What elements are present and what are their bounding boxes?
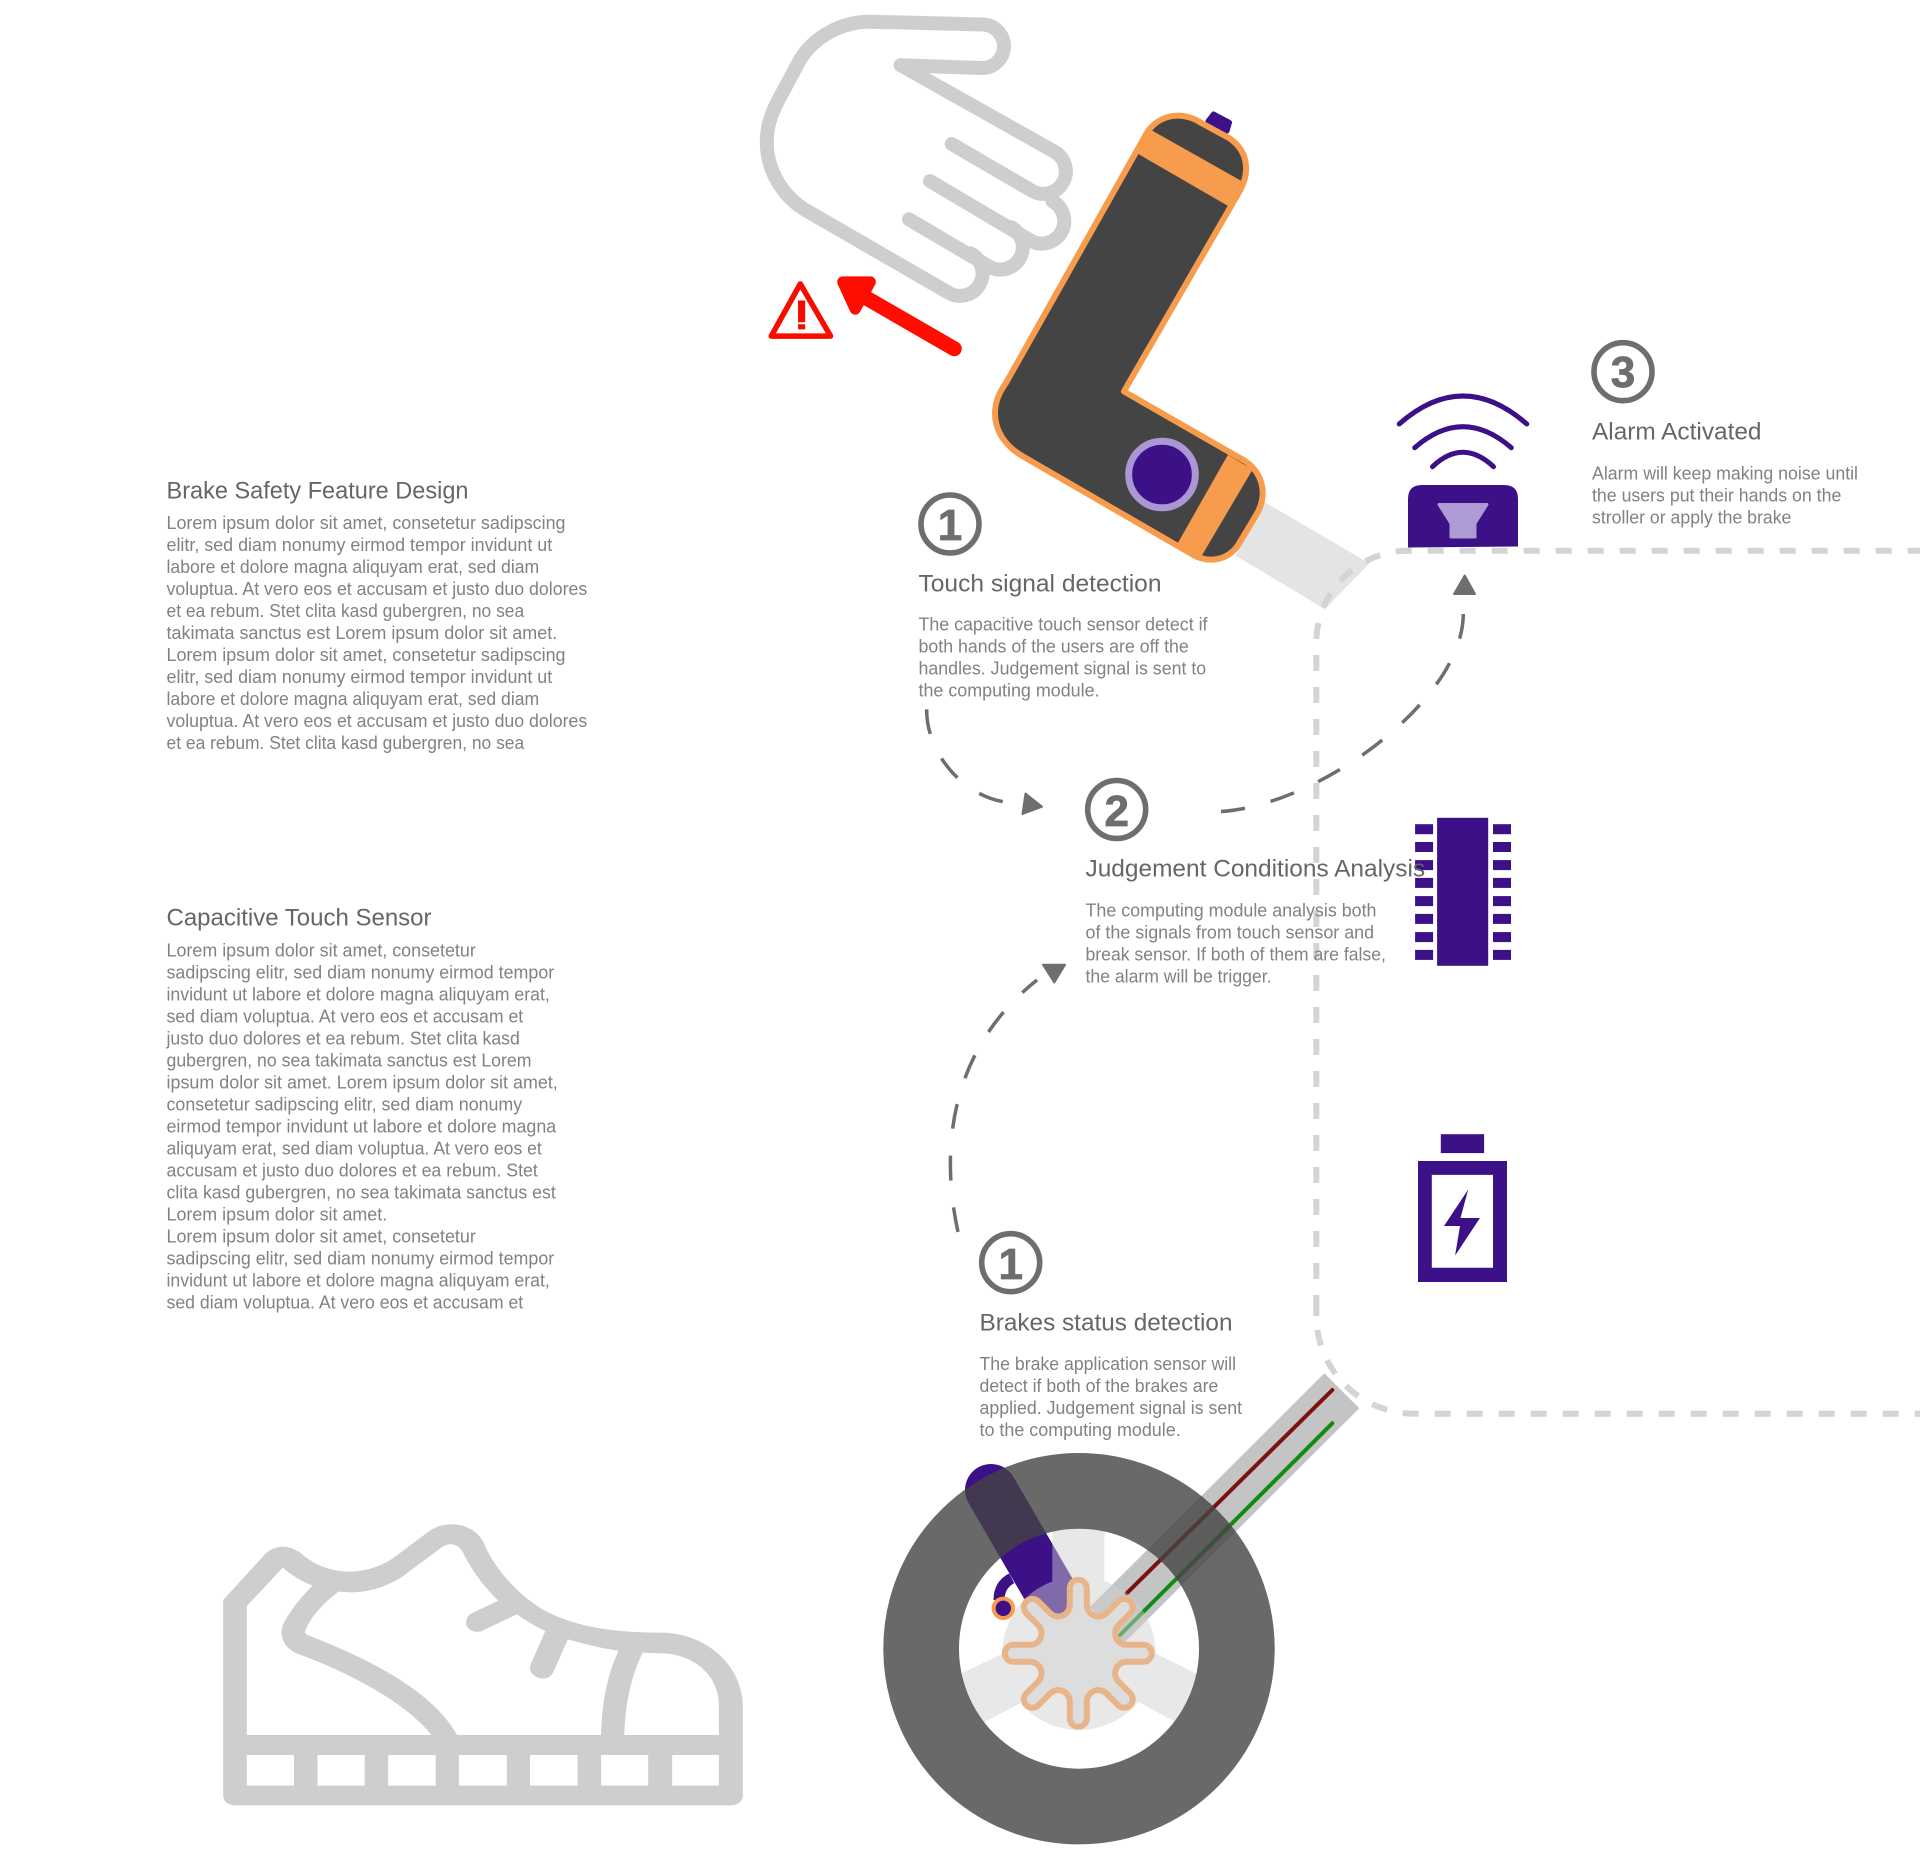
arrow: hand moving away xyxy=(843,282,954,349)
body text xyxy=(1592,463,1858,527)
body text: elitr, sed diam nonumy eirmod tempor invidunt ut xyxy=(166,535,552,555)
body text: Lorem ipsum dolor sit amet, consetetur xyxy=(166,1226,476,1246)
body text: Alarm will keep making noise until xyxy=(1592,463,1858,483)
body text: voluptua. At vero eos et accusam et justo duo dolores xyxy=(166,579,587,599)
heading: Touch signal detection xyxy=(918,571,1162,598)
body text: the alarm will be trigger. xyxy=(1086,966,1272,986)
stroller handle xyxy=(995,114,1263,560)
touch sensor button xyxy=(1129,441,1195,508)
heading: Judgement Conditions Analysis xyxy=(1086,856,1425,883)
heading: Capacitive Touch Sensor xyxy=(166,905,432,932)
body text: both hands of the users are off the xyxy=(918,637,1189,657)
step 2: Judgement Conditions Analysis xyxy=(1086,780,1425,986)
green signal wire xyxy=(1120,1423,1332,1635)
body text xyxy=(918,615,1208,701)
text block: Capacitive Touch Sensor xyxy=(166,905,558,1312)
step number badge: 3 xyxy=(1611,348,1635,397)
body text: et ea rebum. Stet clita kasd gubergren, no sea xyxy=(166,733,525,753)
body text: invidunt ut labore et dolore magna aliquyam erat, xyxy=(166,1270,550,1290)
flow arrow: brake detection to analysis xyxy=(950,965,1065,1232)
body text: ipsum dolor sit amet. Lorem ipsum dolor sit amet, xyxy=(166,1072,558,1092)
body text: invidunt ut labore et dolore magna aliquyam erat, xyxy=(166,984,550,1004)
body text: justo duo dolores et ea rebum. Stet clita kasd xyxy=(166,1028,520,1048)
body text: to the computing module. xyxy=(980,1420,1181,1440)
body text: the computing module. xyxy=(918,681,1100,701)
brake gear disc xyxy=(1005,1580,1152,1727)
body text: the users put their hands on the xyxy=(1592,485,1841,505)
body text: The capacitive touch sensor detect if xyxy=(918,615,1208,635)
heading: Brake Safety Feature Design xyxy=(166,477,468,504)
step 1: Brakes status detection xyxy=(980,1234,1242,1440)
hub and spokes xyxy=(962,1528,1196,1730)
handle body xyxy=(995,116,1263,560)
body text: sadipscing elitr, sed diam nonumy eirmod tempor xyxy=(166,962,554,982)
sensor cable strap xyxy=(1090,1373,1359,1645)
body text xyxy=(166,940,558,1312)
step number badge: 2 xyxy=(1104,787,1129,836)
body text: gubergren, no sea takimata sanctus est Lorem xyxy=(166,1050,532,1070)
step number badge xyxy=(982,1234,1040,1292)
step number badge xyxy=(1088,780,1146,838)
body text: Lorem ipsum dolor sit amet, consetetur sadipscing xyxy=(166,513,566,533)
body text: eirmod tempor invidunt ut labore et dolore magna xyxy=(166,1116,557,1136)
heading: Alarm Activated xyxy=(1592,418,1762,445)
step number badge: 1 xyxy=(938,501,962,550)
body text: takimata sanctus est Lorem ipsum dolor sit amet. xyxy=(166,623,557,643)
body text: The computing module analysis both xyxy=(1086,900,1376,920)
body text: stroller or apply the brake xyxy=(1592,507,1791,527)
body text: sed diam voluptua. At vero eos et accusam et xyxy=(166,1006,523,1026)
brake sensor dot xyxy=(994,1599,1013,1618)
body text: sadipscing elitr, sed diam nonumy eirmod tempor xyxy=(166,1248,554,1268)
body text: accusam et justo duo dolores et ea rebum. Stet xyxy=(166,1160,538,1180)
body text: elitr, sed diam nonumy eirmod tempor invidunt ut xyxy=(166,667,552,687)
flow arrow: analysis to alarm xyxy=(1221,576,1475,812)
icon: shoe xyxy=(223,1524,743,1805)
brake arm xyxy=(991,1490,1052,1600)
step number badge xyxy=(1594,343,1652,401)
body text: aliquyam erat, sed diam voluptua. At vero eos et xyxy=(166,1138,542,1158)
step 1: Touch signal detection xyxy=(918,495,1208,701)
tire xyxy=(921,1491,1237,1807)
wheel with brake sensor xyxy=(921,1373,1359,1807)
body text xyxy=(980,1354,1242,1440)
text block: Brake Safety Feature Design xyxy=(166,477,587,753)
icon: handle top button xyxy=(1208,114,1230,131)
flow arrow: touch detection to analysis xyxy=(927,709,1042,814)
body text: Lorem ipsum dolor sit amet, consetetur sadipscing xyxy=(166,645,566,665)
body text: voluptua. At vero eos et accusam et justo duo dolores xyxy=(166,711,587,731)
body text: Lorem ipsum dolor sit amet. xyxy=(166,1204,387,1224)
body text: handles. Judgement signal is sent to xyxy=(918,659,1206,679)
body text: consetetur sadipscing elitr, sed diam nonumy xyxy=(166,1094,522,1114)
step 3: Alarm Activated xyxy=(1592,343,1858,527)
step number badge: 1 xyxy=(998,1240,1023,1289)
icon: warning triangle xyxy=(771,284,831,336)
body text xyxy=(1086,900,1386,986)
step number badge xyxy=(921,495,979,553)
body text: The brake application sensor will xyxy=(980,1354,1236,1374)
body text: break sensor. If both of them are false, xyxy=(1086,944,1386,964)
body text: of the signals from touch sensor and xyxy=(1086,922,1374,942)
body text: sed diam voluptua. At vero eos et accusam et xyxy=(166,1292,523,1312)
body text: et ea rebum. Stet clita kasd gubergren, no sea xyxy=(166,601,525,621)
icon: computing chip xyxy=(1415,818,1511,966)
body text: detect if both of the brakes are xyxy=(980,1376,1218,1396)
body text: applied. Judgement signal is sent xyxy=(980,1398,1242,1418)
body text: Lorem ipsum dolor sit amet, consetetur xyxy=(166,940,476,960)
body text: clita kasd gubergren, no sea takimata sanctus est xyxy=(166,1182,556,1202)
dashed frame: stroller body outline xyxy=(1316,551,1920,1414)
icon: battery xyxy=(1418,1134,1507,1282)
red signal wire xyxy=(1127,1390,1332,1593)
body text: labore et dolore magna aliquyam erat, sed diam xyxy=(166,557,539,577)
body text xyxy=(166,513,587,753)
body text: labore et dolore magna aliquyam erat, sed diam xyxy=(166,689,539,709)
icon: alarm speaker with sound waves xyxy=(1399,396,1527,548)
icon: hand outline xyxy=(767,22,1066,296)
heading: Brakes status detection xyxy=(980,1310,1232,1337)
handle connector strap xyxy=(1236,502,1370,609)
